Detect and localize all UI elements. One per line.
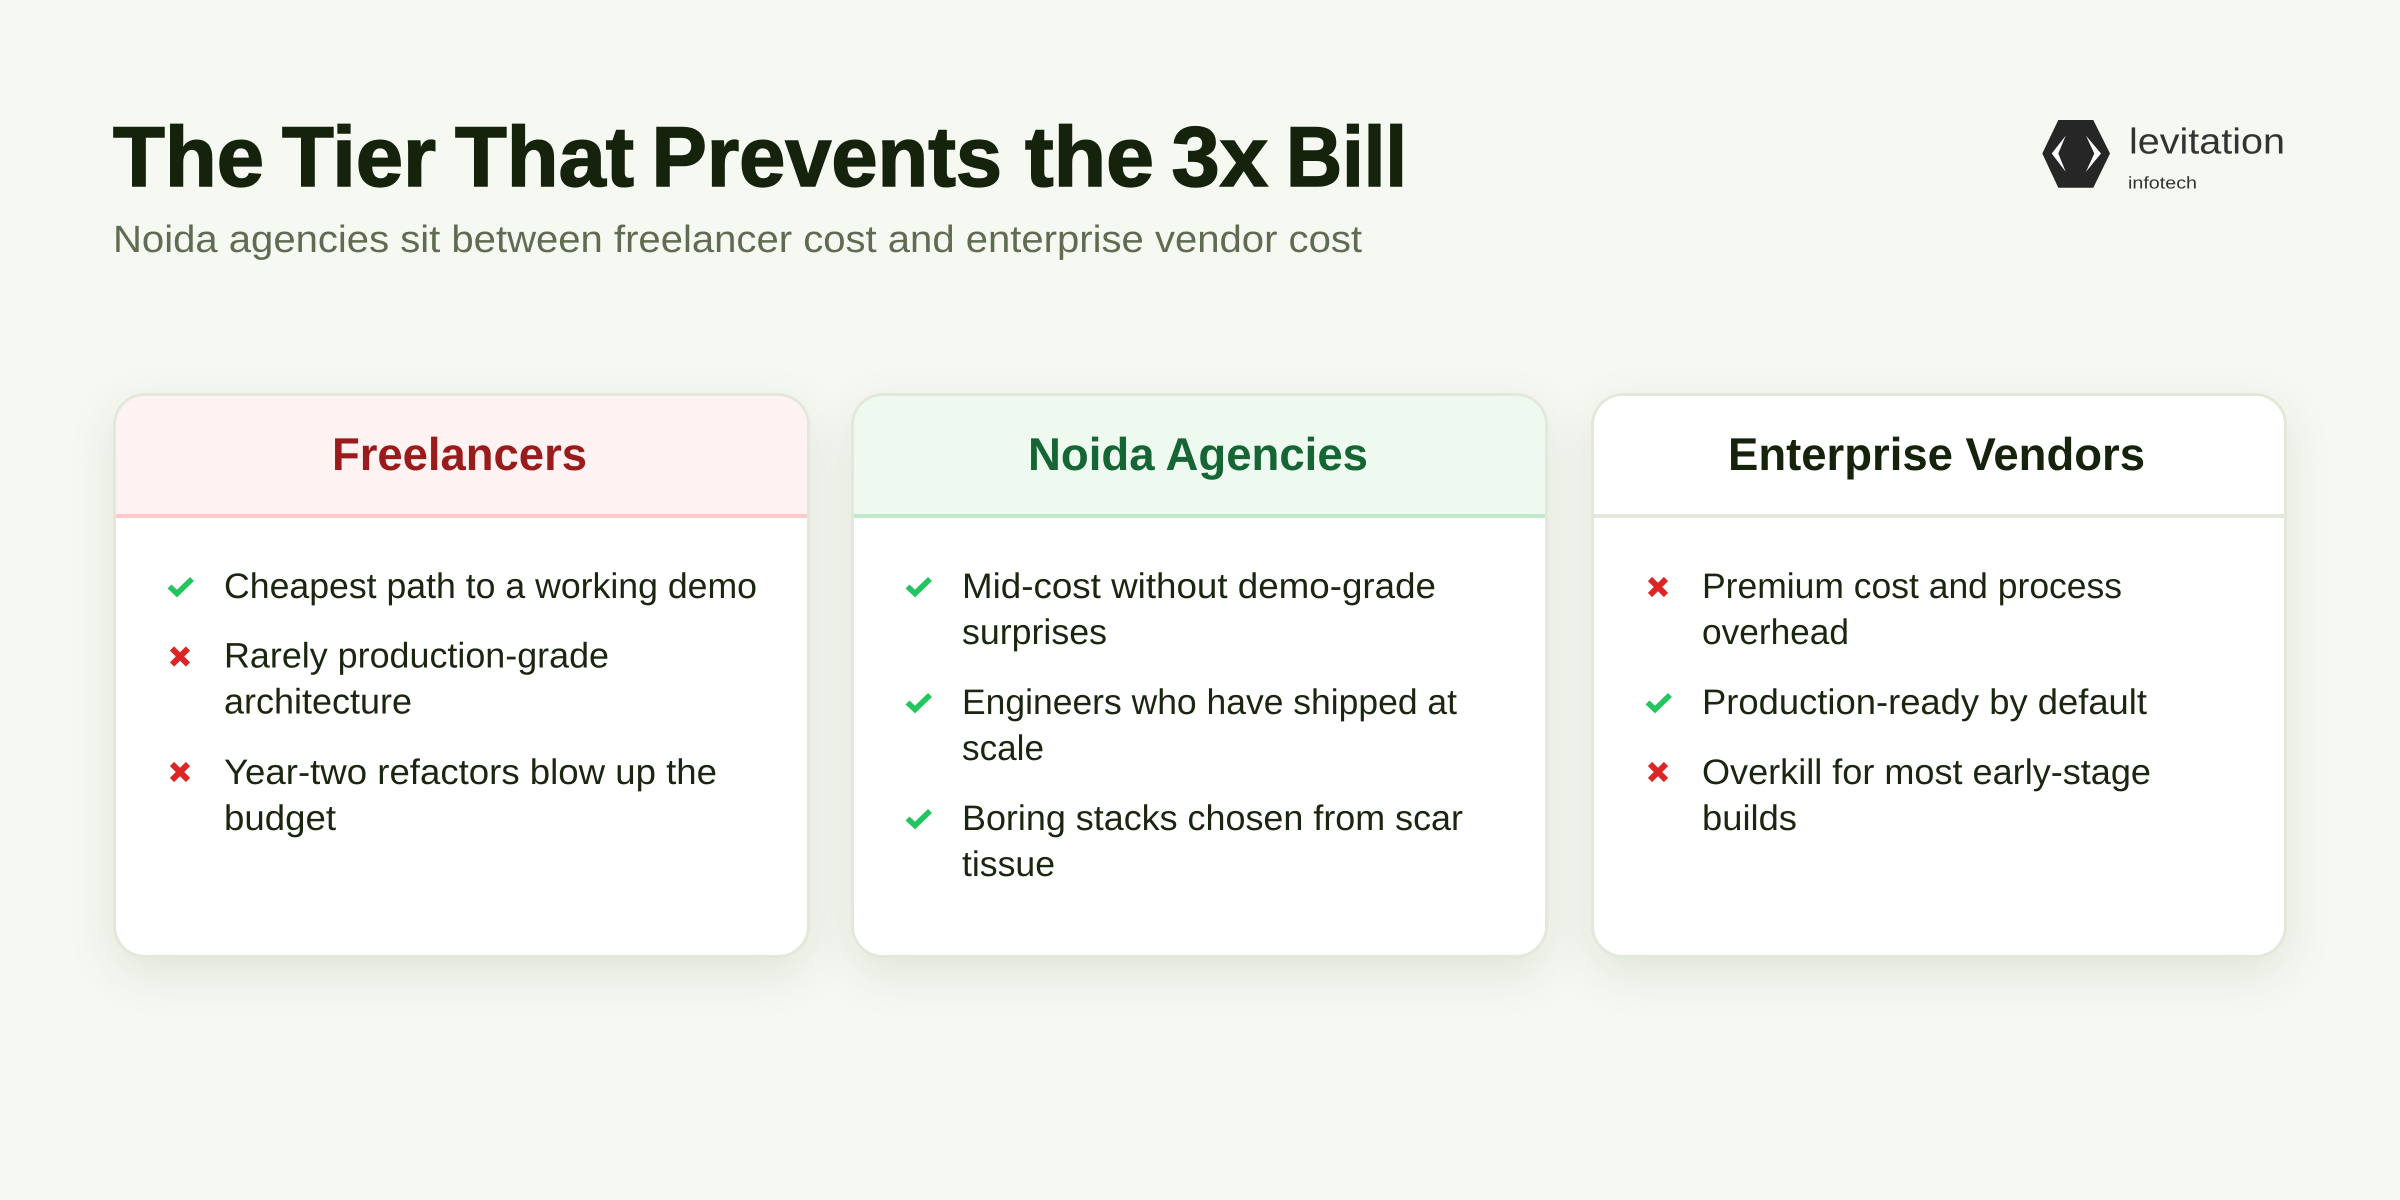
panel header: Enterprise Vendors xyxy=(1594,396,2284,518)
heading: Enterprise Vendors xyxy=(1728,428,2145,480)
title: Bill xyxy=(1286,110,1407,205)
item text: overhead xyxy=(1702,612,1849,652)
icon: check xyxy=(908,811,930,826)
icon: cross xyxy=(172,764,188,780)
item text xyxy=(962,798,1463,884)
icon: cross xyxy=(1650,764,1666,780)
item text: Year-two refactors blow up the xyxy=(224,752,717,792)
title: The xyxy=(113,110,264,205)
logo: levitation infotech xyxy=(2042,120,2285,192)
icon: check xyxy=(908,579,930,594)
logo wordmark: levitation xyxy=(2129,120,2285,162)
item text: builds xyxy=(1702,798,1797,838)
panel header: Noida Agencies xyxy=(854,396,1545,518)
icon: hexagon with chevrons xyxy=(2042,120,2110,188)
item text xyxy=(1702,752,2151,838)
item text: architecture xyxy=(224,682,412,722)
item text: Mid-cost without demo-grade xyxy=(962,566,1436,606)
title: the xyxy=(1025,110,1154,205)
panel header: Freelancers xyxy=(116,396,807,518)
subtitle: Noida agencies sit between freelancer cost and enterprise vendor cost xyxy=(113,219,1362,261)
heading: Noida Agencies xyxy=(1028,428,1368,480)
panel content: Noida Agencies xyxy=(906,428,1463,884)
icon: cross xyxy=(1650,579,1666,595)
page header xyxy=(113,110,1407,261)
item text: Engineers who have shipped at xyxy=(962,682,1457,722)
item text: Boring stacks chosen from scar xyxy=(962,798,1463,838)
item text xyxy=(962,566,1436,652)
heading: Freelancers xyxy=(332,428,587,480)
item text: Production-ready by default xyxy=(1702,682,2147,722)
item text: tissue xyxy=(962,844,1055,884)
title: 3x xyxy=(1172,110,1268,205)
title: That xyxy=(455,110,634,205)
item text: surprises xyxy=(962,612,1107,652)
item text: scale xyxy=(962,728,1044,768)
item text: budget xyxy=(224,798,336,838)
panel content: Freelancers xyxy=(168,428,757,838)
panel: Noida Agencies xyxy=(851,393,1548,958)
icon: check xyxy=(170,579,192,594)
item text xyxy=(224,636,609,722)
item text: Rarely production-grade xyxy=(224,636,609,676)
logo sub-wordmark: infotech xyxy=(2128,174,2197,192)
item text: Cheapest path to a working demo xyxy=(224,566,757,606)
item text: Overkill for most early-stage xyxy=(1702,752,2151,792)
icon: check xyxy=(1648,695,1670,710)
icon: check xyxy=(908,695,930,710)
item text: Premium cost and process xyxy=(1702,566,2122,606)
item text xyxy=(1702,566,2122,652)
item text xyxy=(962,682,1457,768)
panel content: Enterprise Vendors xyxy=(1646,428,2151,838)
panel: Enterprise Vendors xyxy=(1591,393,2287,958)
title xyxy=(113,110,1407,205)
item text xyxy=(224,752,717,838)
title: Prevents xyxy=(652,110,1002,205)
icon: cross xyxy=(172,648,188,664)
panel: Freelancers xyxy=(113,393,810,958)
title: Tier xyxy=(282,110,436,205)
